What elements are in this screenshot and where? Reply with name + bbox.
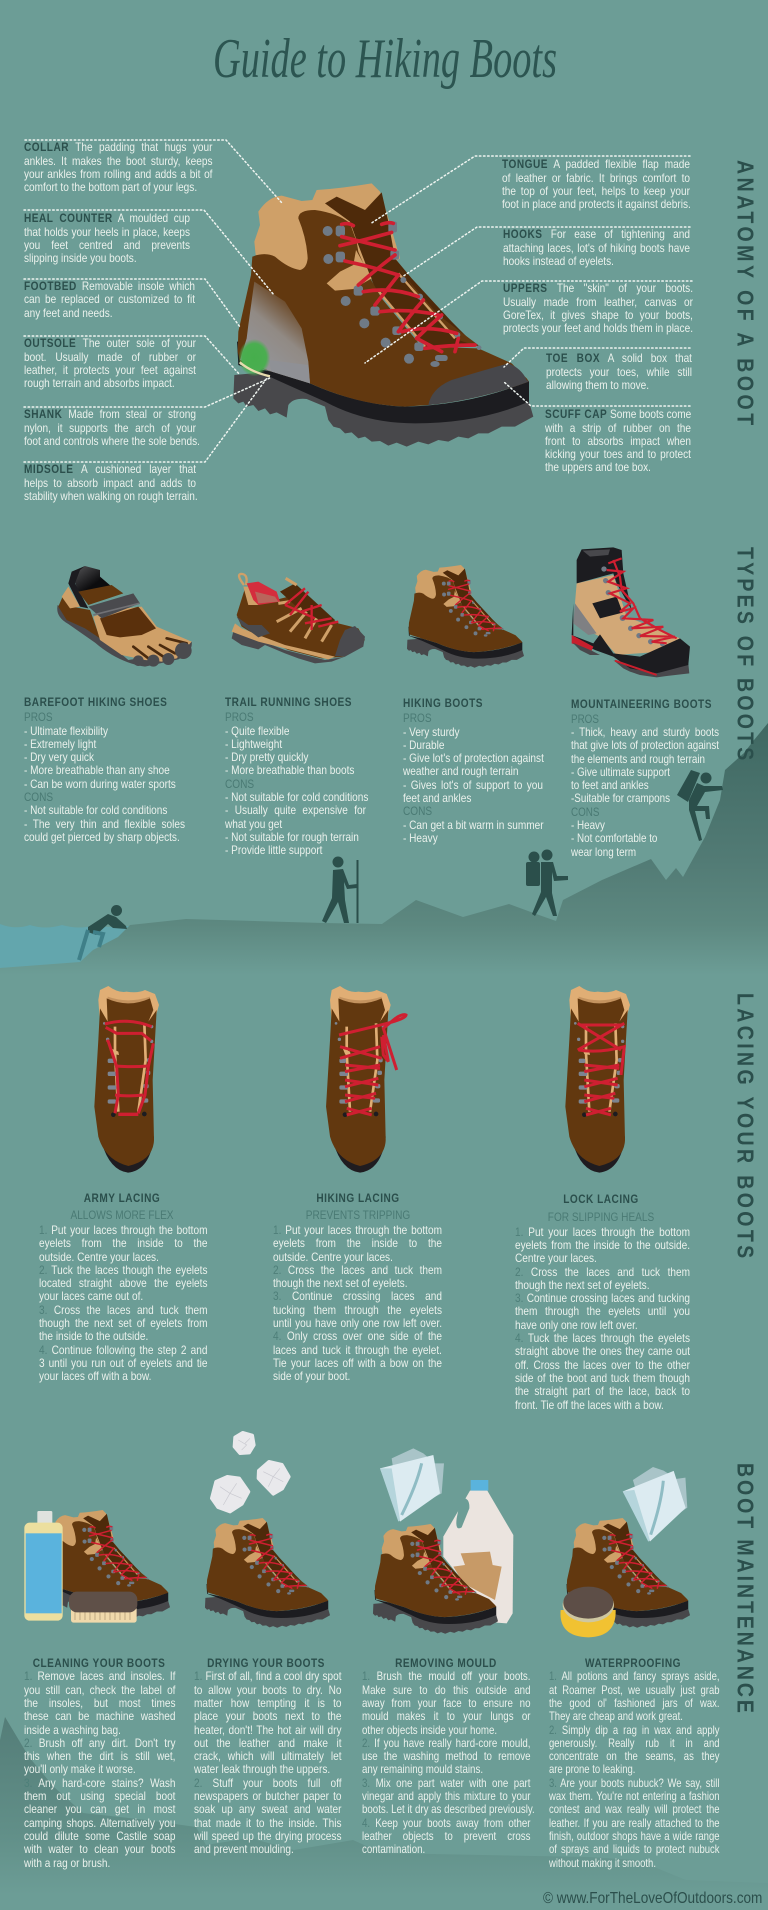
- steps: hiking lacing: side of your boot.: [273, 1369, 350, 1383]
- steps: hiking lacing: 2. Cross the laces and tuck them: [273, 1263, 442, 1277]
- list: mountaineering boots: - Heavy: [571, 818, 605, 832]
- boot: [205, 1518, 330, 1628]
- text: shank: foot and controls where the sole bends.: [24, 434, 200, 448]
- steps: drying your boots: and prevent moulding.: [194, 1842, 293, 1856]
- text: collar: your ankles from rolling and adds a bit of: [24, 167, 212, 181]
- steps: waterproofing: [548, 1669, 720, 1870]
- text: uppers: [503, 281, 693, 335]
- steps: removing mould: 4. Keep your boots away from other: [362, 1816, 530, 1830]
- text: scuff cap: with a strip of rubber on the: [545, 421, 691, 435]
- steps: drying your boots: crack, which will ultimately let: [194, 1749, 341, 1763]
- heading: waterproofing: WATERPROOFING: [585, 1656, 681, 1670]
- steps: drying your boots: place your boots next to the: [194, 1709, 341, 1723]
- steps: waterproofing: of sprays and liquids to protect nubuck: [548, 1842, 719, 1856]
- text: midsole: MIDSOLE A cushioned layer that: [24, 462, 196, 476]
- steps: drying your boots: [194, 1669, 342, 1856]
- hiker: walking with stick: [322, 856, 358, 923]
- text: toe box: protects your toes, while still: [546, 365, 692, 379]
- steps: hiking lacing: until you have only one row left over.: [273, 1316, 442, 1330]
- steps: drying your boots: will speed up the drying process: [194, 1829, 341, 1843]
- subheading: army lacing: ALLOWS MORE FLEX: [70, 1208, 174, 1222]
- steps: cleaning your boots: 3. Any hard-core stains? Wash: [24, 1776, 175, 1790]
- list: barefoot hiking shoes: - Not suitable for cold conditions: [24, 803, 167, 817]
- list: trail running shoes: - More breathable than boots: [225, 763, 354, 777]
- text: footbed: FOOTBED Removable insole which: [24, 279, 195, 293]
- heading: cleaning your boots: CLEANING YOUR BOOTS: [33, 1656, 166, 1670]
- list: mountaineering boots: - Not comfortable to: [571, 831, 657, 845]
- list: barefoot hiking shoes: PROS: [24, 710, 53, 724]
- boot: [565, 1518, 690, 1628]
- list: trail running shoes: PROS: [225, 710, 254, 724]
- steps: drying your boots: heater, don't! The hot air will dry: [194, 1723, 341, 1737]
- text: scuff cap: front to absorbs impact when: [545, 434, 691, 448]
- steps: waterproofing: contest and wax really will protect the: [548, 1802, 719, 1816]
- list: hiking boots: weather and rough terrain: [403, 764, 518, 778]
- list: barefoot hiking shoes: - More breathable than any shoe: [24, 763, 170, 777]
- side heading: boot maintenance: BOOT MAINTENANCE: [732, 1463, 758, 1713]
- steps: lock lacing: 2. Cross the laces and tuck them: [515, 1265, 690, 1279]
- steps: waterproofing: wax them. You're not entering a fashion: [548, 1789, 719, 1803]
- footer credit: © www.ForTheLoveOfOutdoors.com: [543, 1890, 762, 1907]
- steps: lock lacing: 1. Put your laces through the bottom: [515, 1225, 690, 1239]
- steps: drying your boots: soak up any sweat and water: [194, 1802, 341, 1816]
- land silhouette: [0, 723, 768, 975]
- list: mountaineering boots: CONS: [571, 805, 599, 819]
- text: uppers: UPPERS The "skin" of your boots.: [503, 281, 693, 295]
- subheading: lock lacing: FOR SLIPPING HEALS: [548, 1210, 654, 1224]
- text: outsole: [24, 336, 196, 390]
- hiking boot: [407, 565, 524, 668]
- list: hiking boots: CONS: [403, 804, 432, 818]
- steps: hiking lacing: [273, 1223, 442, 1383]
- steps: waterproofing: 1. All potions and fancy sprays aside,: [548, 1669, 719, 1683]
- list: trail running shoes: - Dry pretty quickly: [225, 750, 308, 764]
- steps: drying your boots: 2. Stuff your boots full off: [194, 1776, 341, 1790]
- steps: drying your boots: water leak through the uppers.: [194, 1762, 330, 1776]
- steps: hiking lacing: 4. Only cross over one side of the: [273, 1329, 442, 1343]
- heading: mountaineering boots: MOUNTAINEERING BOOTS: [571, 697, 712, 711]
- steps: army lacing: 3 until you run out of eyelets and tie: [39, 1356, 207, 1370]
- hiker: mountain climber: [677, 770, 723, 841]
- text: shank: nylon, it supports the arch of your: [24, 421, 196, 435]
- steps: removing mould: vinegar and apply this mixture to your: [362, 1789, 530, 1803]
- steps: removing mould: other objects inside your home.: [362, 1723, 497, 1737]
- heading: hiking lacing: HIKING LACING: [316, 1191, 399, 1205]
- steps: waterproofing: the good ol' fashioned jars of wax.: [548, 1696, 719, 1710]
- steps: waterproofing: They are cheap and work great.: [548, 1709, 682, 1723]
- steps: drying your boots: 1. First of all, find a cool dry spot: [194, 1669, 341, 1683]
- steps: army lacing: 2. Tuck the laces though the eyelets: [39, 1263, 207, 1277]
- list: mountaineering boots: the elements and rough terrain: [571, 752, 705, 766]
- steps: cleaning your boots: cleaner you can get in most: [24, 1802, 175, 1816]
- side heading: anatomy of a boot: ANATOMY OF A BOOT: [732, 160, 758, 425]
- list: hiking boots: - Gives lot's of support to you: [403, 778, 543, 792]
- steps: hiking lacing: outside. Centre your laces.: [273, 1250, 393, 1264]
- text: uppers: Usually made from leather, canvas or: [503, 295, 693, 309]
- steps: removing mould: leather objects to prevent cross: [362, 1829, 530, 1843]
- list: mountaineering boots: wear long term: [571, 845, 636, 859]
- steps: cleaning your boots: them out using special boot: [24, 1789, 175, 1803]
- heading: army lacing: ARMY LACING: [84, 1191, 160, 1205]
- steps: lock lacing: 3. Continue crossing laces and tucking: [515, 1291, 690, 1305]
- text: toe box: allowing them to move.: [546, 378, 649, 392]
- lacing boot: army lacing: [94, 986, 159, 1173]
- brush: [69, 1592, 137, 1623]
- text: tongue: [502, 157, 691, 211]
- steps: drying your boots: that made it to the inside. This: [194, 1816, 341, 1830]
- steps: lock lacing: Centre your laces.: [515, 1251, 597, 1265]
- steps: cleaning your boots: you still can, check the label of: [24, 1683, 175, 1697]
- list: trail running shoes: [225, 710, 368, 857]
- hiker: climbing out of water: [79, 905, 127, 960]
- list: barefoot hiking shoes: CONS: [24, 790, 53, 804]
- steps: hiking lacing: laces and tuck it through the eyelet.: [273, 1343, 442, 1357]
- text: tongue: foot in place and protects it against debris.: [502, 197, 691, 211]
- text: hooks: attaching laces, lot's of hiking boots have: [503, 241, 690, 255]
- steps: cleaning your boots: the insoles, but most times: [24, 1696, 175, 1710]
- drying illustration: [205, 1433, 330, 1628]
- text: scuff cap: SCUFF CAP Some boots come: [545, 407, 691, 421]
- text: footbed: [24, 279, 195, 320]
- steps: lock lacing: straight above the ones they came out: [515, 1344, 690, 1358]
- steps: army lacing: your laces came out of.: [39, 1289, 143, 1303]
- steps: army lacing: the inside to the outside.: [39, 1329, 148, 1343]
- steps: waterproofing: concentrate on the seams, as they: [548, 1749, 719, 1763]
- steps: removing mould: contamination.: [362, 1842, 425, 1856]
- list: mountaineering boots: that give lots of protection against: [571, 738, 719, 752]
- mountaineering boot: [572, 547, 690, 677]
- steps: lock lacing: front. Tie off the laces with a bow.: [515, 1398, 664, 1412]
- heading: lock lacing: LOCK LACING: [563, 1192, 639, 1206]
- text: shank: [24, 407, 200, 448]
- steps: hiking lacing: eyelets from the inside to the: [273, 1236, 442, 1250]
- text: outsole: OUTSOLE The outer sole of your: [24, 336, 196, 350]
- steps: hiking lacing: tucking them through the eyelets: [273, 1303, 442, 1317]
- text: collar: [24, 140, 212, 194]
- list: mountaineering boots: to feet and ankles: [571, 778, 649, 792]
- side heading: types of boots: TYPES OF BOOTS: [732, 547, 758, 760]
- list: trail running shoes: - Lightweight: [225, 737, 282, 751]
- steps: army lacing: 1. Put your laces through the bottom: [39, 1223, 207, 1237]
- cleaning illustration: [24, 1510, 170, 1623]
- text: midsole: helps to absorb impact and adds to: [24, 476, 196, 490]
- steps: removing mould: mould makes it to your lungs or: [362, 1709, 530, 1723]
- steps: army lacing: located straight above the eyelets: [39, 1276, 207, 1290]
- steps: army lacing: outside. Centre your laces.: [39, 1250, 159, 1264]
- steps: army lacing: 4. Continue following the step 2 and: [39, 1343, 207, 1357]
- list: hiking boots: PROS: [403, 711, 432, 725]
- steps: cleaning your boots: camping shops. Alternatively you: [24, 1816, 175, 1830]
- waterproofing illustration: [560, 1463, 694, 1637]
- steps: removing mould: boots. Let it dry as described previously.: [362, 1802, 535, 1816]
- text: collar: comfort to the bottom part of your legs.: [24, 180, 197, 194]
- plastic sheet: [620, 1463, 694, 1544]
- text: footbed: can be replaced or customized to fit: [24, 292, 195, 306]
- hiker: backpacker: [526, 850, 568, 916]
- steps: waterproofing: 2. Simply dip a rag in wax and apply: [548, 1723, 719, 1737]
- steps: drying your boots: matter how tempting it is to: [194, 1696, 341, 1710]
- steps: hiking lacing: 3. Continue crossing laces and: [273, 1289, 442, 1303]
- text: tongue: TONGUE A padded flexible flap made: [502, 157, 690, 171]
- list: barefoot hiking shoes: - Can be worn during water sports: [24, 777, 176, 791]
- steps: army lacing: your laces off with a bow.: [39, 1369, 151, 1383]
- steps: removing mould: 2. If you have really hard-core mould,: [362, 1736, 530, 1750]
- text: tongue: the top of your feet, helps to keep your: [502, 184, 690, 198]
- steps: drying your boots: newspapers or butcher paper to: [194, 1789, 341, 1803]
- list: hiking boots: [403, 711, 544, 845]
- text: midsole: stability when walking on rough terrain.: [24, 489, 198, 503]
- paper balls: [212, 1433, 289, 1512]
- list: barefoot hiking shoes: [24, 710, 185, 844]
- list: trail running shoes: what you get: [225, 817, 282, 831]
- list: mountaineering boots: - Thick, heavy and sturdy boots: [571, 725, 719, 739]
- steps: army lacing: eyelets from the inside to the: [39, 1236, 207, 1250]
- text: toe box: TOE BOX A solid box that: [546, 351, 692, 365]
- jug: [443, 1480, 513, 1623]
- main boot illustration: [233, 183, 533, 447]
- list: barefoot hiking shoes: - Dry very quick: [24, 750, 94, 764]
- text: heal counter: you feet centred and prevents: [24, 238, 190, 252]
- steps: waterproofing: at Roamer Post, we usually just grab: [548, 1683, 719, 1697]
- steps: lock lacing: though the next set of eyelets.: [515, 1278, 649, 1292]
- boot: [373, 1524, 498, 1634]
- text: collar: ankles. It makes the boot sturdy, keeps: [24, 154, 212, 168]
- steps: lock lacing: 4. Tuck the laces through the eyelets: [515, 1331, 690, 1345]
- steps: cleaning your boots: with water to clean your boots: [24, 1842, 175, 1856]
- callout leader lines: [24, 140, 692, 462]
- heading: removing mould: REMOVING MOULD: [395, 1656, 496, 1670]
- steps: hiking lacing: Tie your laces off with a bow on the: [273, 1356, 442, 1370]
- list: hiking boots: - Durable: [403, 738, 444, 752]
- steps: waterproofing: leather. If you are really attached to the: [548, 1816, 719, 1830]
- steps: lock lacing: have only one row left over.: [515, 1318, 638, 1332]
- steps: cleaning your boots: these can be machine washed: [24, 1709, 175, 1723]
- text: heal counter: that holds your heels in place, keeps: [24, 225, 190, 239]
- bottle: [24, 1511, 63, 1621]
- list: mountaineering boots: -Suitable for crampons: [571, 791, 670, 805]
- text: scuff cap: the uppers and toe box.: [545, 460, 651, 474]
- text: hooks: [503, 227, 690, 268]
- list: barefoot hiking shoes: - The very thin and flexible soles: [24, 817, 185, 831]
- steps: cleaning your boots: [24, 1669, 176, 1870]
- steps: waterproofing: are prone to leaking.: [548, 1762, 635, 1776]
- steps: lock lacing: them through the eyelets until you: [515, 1304, 690, 1318]
- title: Guide to Hiking Boots: [213, 28, 557, 90]
- text: footbed: any feet and needs.: [24, 306, 113, 320]
- text: midsole: [24, 462, 198, 503]
- text: scuff cap: [545, 407, 691, 474]
- steps: lock lacing: [515, 1225, 690, 1412]
- steps: lock lacing: eyelets from the inside to the outside.: [515, 1238, 690, 1252]
- list: trail running shoes: CONS: [225, 777, 254, 791]
- text: outsole: rough terrain and absorbs impact.: [24, 376, 175, 390]
- text: toe box: [546, 351, 692, 392]
- list: mountaineering boots: - Give ultimate support: [571, 765, 670, 779]
- steps: removing mould: Make sure to do this outside and: [362, 1683, 530, 1697]
- steps: waterproofing: without making it smooth.: [548, 1856, 655, 1870]
- list: hiking boots: - Give lot's of protection against: [403, 751, 544, 765]
- steps: lock lacing: side of the boot and tuck them though: [515, 1371, 690, 1385]
- steps: removing mould: any remaining mould stains.: [362, 1762, 483, 1776]
- list: hiking boots: - Very sturdy: [403, 725, 460, 739]
- steps: cleaning your boots: 2. Brush off any dirt. Don't try: [24, 1736, 175, 1750]
- steps: cleaning your boots: could dilute some Castile soap: [24, 1829, 175, 1843]
- text: scuff cap: kicking your toes and to protect: [545, 447, 691, 461]
- steps: cleaning your boots: 1. Remove laces and insoles. If: [24, 1669, 175, 1683]
- steps: cleaning your boots: you'll only make it worse.: [24, 1762, 136, 1776]
- steps: hiking lacing: though the next set of eyelets.: [273, 1276, 407, 1290]
- mountains behind types of boots: [0, 723, 768, 975]
- plastic sheet: [380, 1448, 444, 1522]
- steps: lock lacing: the straight part of the lace, back to: [515, 1384, 690, 1398]
- steps: removing mould: [362, 1669, 535, 1856]
- text: shank: SHANK Made from steal or strong: [24, 407, 196, 421]
- steps: cleaning your boots: with a rag or brush.: [24, 1856, 110, 1870]
- steps: removing mould: 1. Brush the mould off your boots.: [362, 1669, 530, 1683]
- list: trail running shoes: - Provide little support: [225, 843, 322, 857]
- list: barefoot hiking shoes: - Extremely light: [24, 737, 96, 751]
- barefoot shoe: [57, 566, 192, 667]
- steps: army lacing: [39, 1223, 208, 1383]
- steps: drying your boots: to allow your boots to dry. No: [194, 1683, 341, 1697]
- text: uppers: protects your feet and holds them in place.: [503, 321, 693, 335]
- heading: drying your boots: DRYING YOUR BOOTS: [207, 1656, 325, 1670]
- text: heal counter: [24, 211, 190, 265]
- list: mountaineering boots: [571, 712, 719, 859]
- list: hiking boots: feet and ankles: [403, 791, 471, 805]
- steps: waterproofing: 3. Are your boots nubuck? We say, still: [548, 1776, 719, 1790]
- list: trail running shoes: - Quite flexible: [225, 724, 289, 738]
- list: trail running shoes: - Not suitable for rough terrain: [225, 830, 359, 844]
- steps: hiking lacing: 1. Put your laces through the bottom: [273, 1223, 442, 1237]
- text: hooks: HOOKS For ease of tightening and: [503, 227, 690, 241]
- list: trail running shoes: - Not suitable for cold conditions: [225, 790, 368, 804]
- list: mountaineering boots: PROS: [571, 712, 599, 726]
- text: collar: COLLAR The padding that hugs your: [24, 140, 212, 154]
- heading: trail running shoes: TRAIL RUNNING SHOES: [225, 695, 352, 709]
- lacing boot: hiking lacing: [326, 986, 406, 1173]
- list: trail running shoes: - Usually quite expensive for: [225, 803, 366, 817]
- water: [0, 924, 135, 968]
- text: uppers: GoreTex, it gives shape to your boots,: [503, 308, 693, 322]
- heading: barefoot hiking shoes: BAREFOOT HIKING SHOES: [24, 695, 167, 709]
- text: tongue: of leather or fabric. It brings comfort to: [502, 171, 690, 185]
- heading: hiking boots: HIKING BOOTS: [403, 696, 483, 710]
- list: barefoot hiking shoes: could get pierced by sharp objects.: [24, 830, 180, 844]
- trail running shoe: [232, 574, 365, 663]
- steps: army lacing: though the next set of eyelets from: [39, 1316, 207, 1330]
- side heading: lacing your boots: LACING YOUR BOOTS: [732, 993, 758, 1258]
- steps: removing mould: use the washing method to remove: [362, 1749, 530, 1763]
- steps: lock lacing: off. Cross the laces over to the other: [515, 1358, 690, 1372]
- boot: [45, 1510, 170, 1620]
- list: hiking boots: - Heavy: [403, 831, 438, 845]
- lacing boot: lock lacing: [565, 986, 630, 1173]
- list: hiking boots: - Can get a bit warm in summer: [403, 818, 544, 832]
- mountains behind maintenance: [0, 1717, 768, 1905]
- steps: waterproofing: finish, outdoor shops have a wide range: [548, 1829, 719, 1843]
- text: heal counter: HEAL COUNTER A moulded cup: [24, 211, 190, 225]
- wax jar: [560, 1587, 616, 1637]
- text: outsole: leather, it protects your feet against: [24, 363, 196, 377]
- steps: drying your boots: out the leather and make it: [194, 1736, 341, 1750]
- steps: cleaning your boots: this when the dirt is still wet,: [24, 1749, 175, 1763]
- steps: removing mould: away from your face to ensure no: [362, 1696, 530, 1710]
- text: outsole: boot. Usually made of rubber or: [24, 350, 196, 364]
- steps: removing mould: 3. Mix one part water with one part: [362, 1776, 530, 1790]
- text: heal counter: slipping inside you boots.: [24, 251, 137, 265]
- mould illustration: [373, 1448, 513, 1634]
- text: hooks: hooks instead of eyelets.: [503, 254, 614, 268]
- steps: army lacing: 3. Cross the laces and tuck them: [39, 1303, 207, 1317]
- steps: cleaning your boots: inside a washing bag.: [24, 1723, 121, 1737]
- subheading: hiking lacing: PREVENTS TRIPPING: [305, 1208, 410, 1222]
- list: barefoot hiking shoes: - Ultimate flexibility: [24, 724, 108, 738]
- steps: waterproofing: generously. Really rub it in and: [548, 1736, 719, 1750]
